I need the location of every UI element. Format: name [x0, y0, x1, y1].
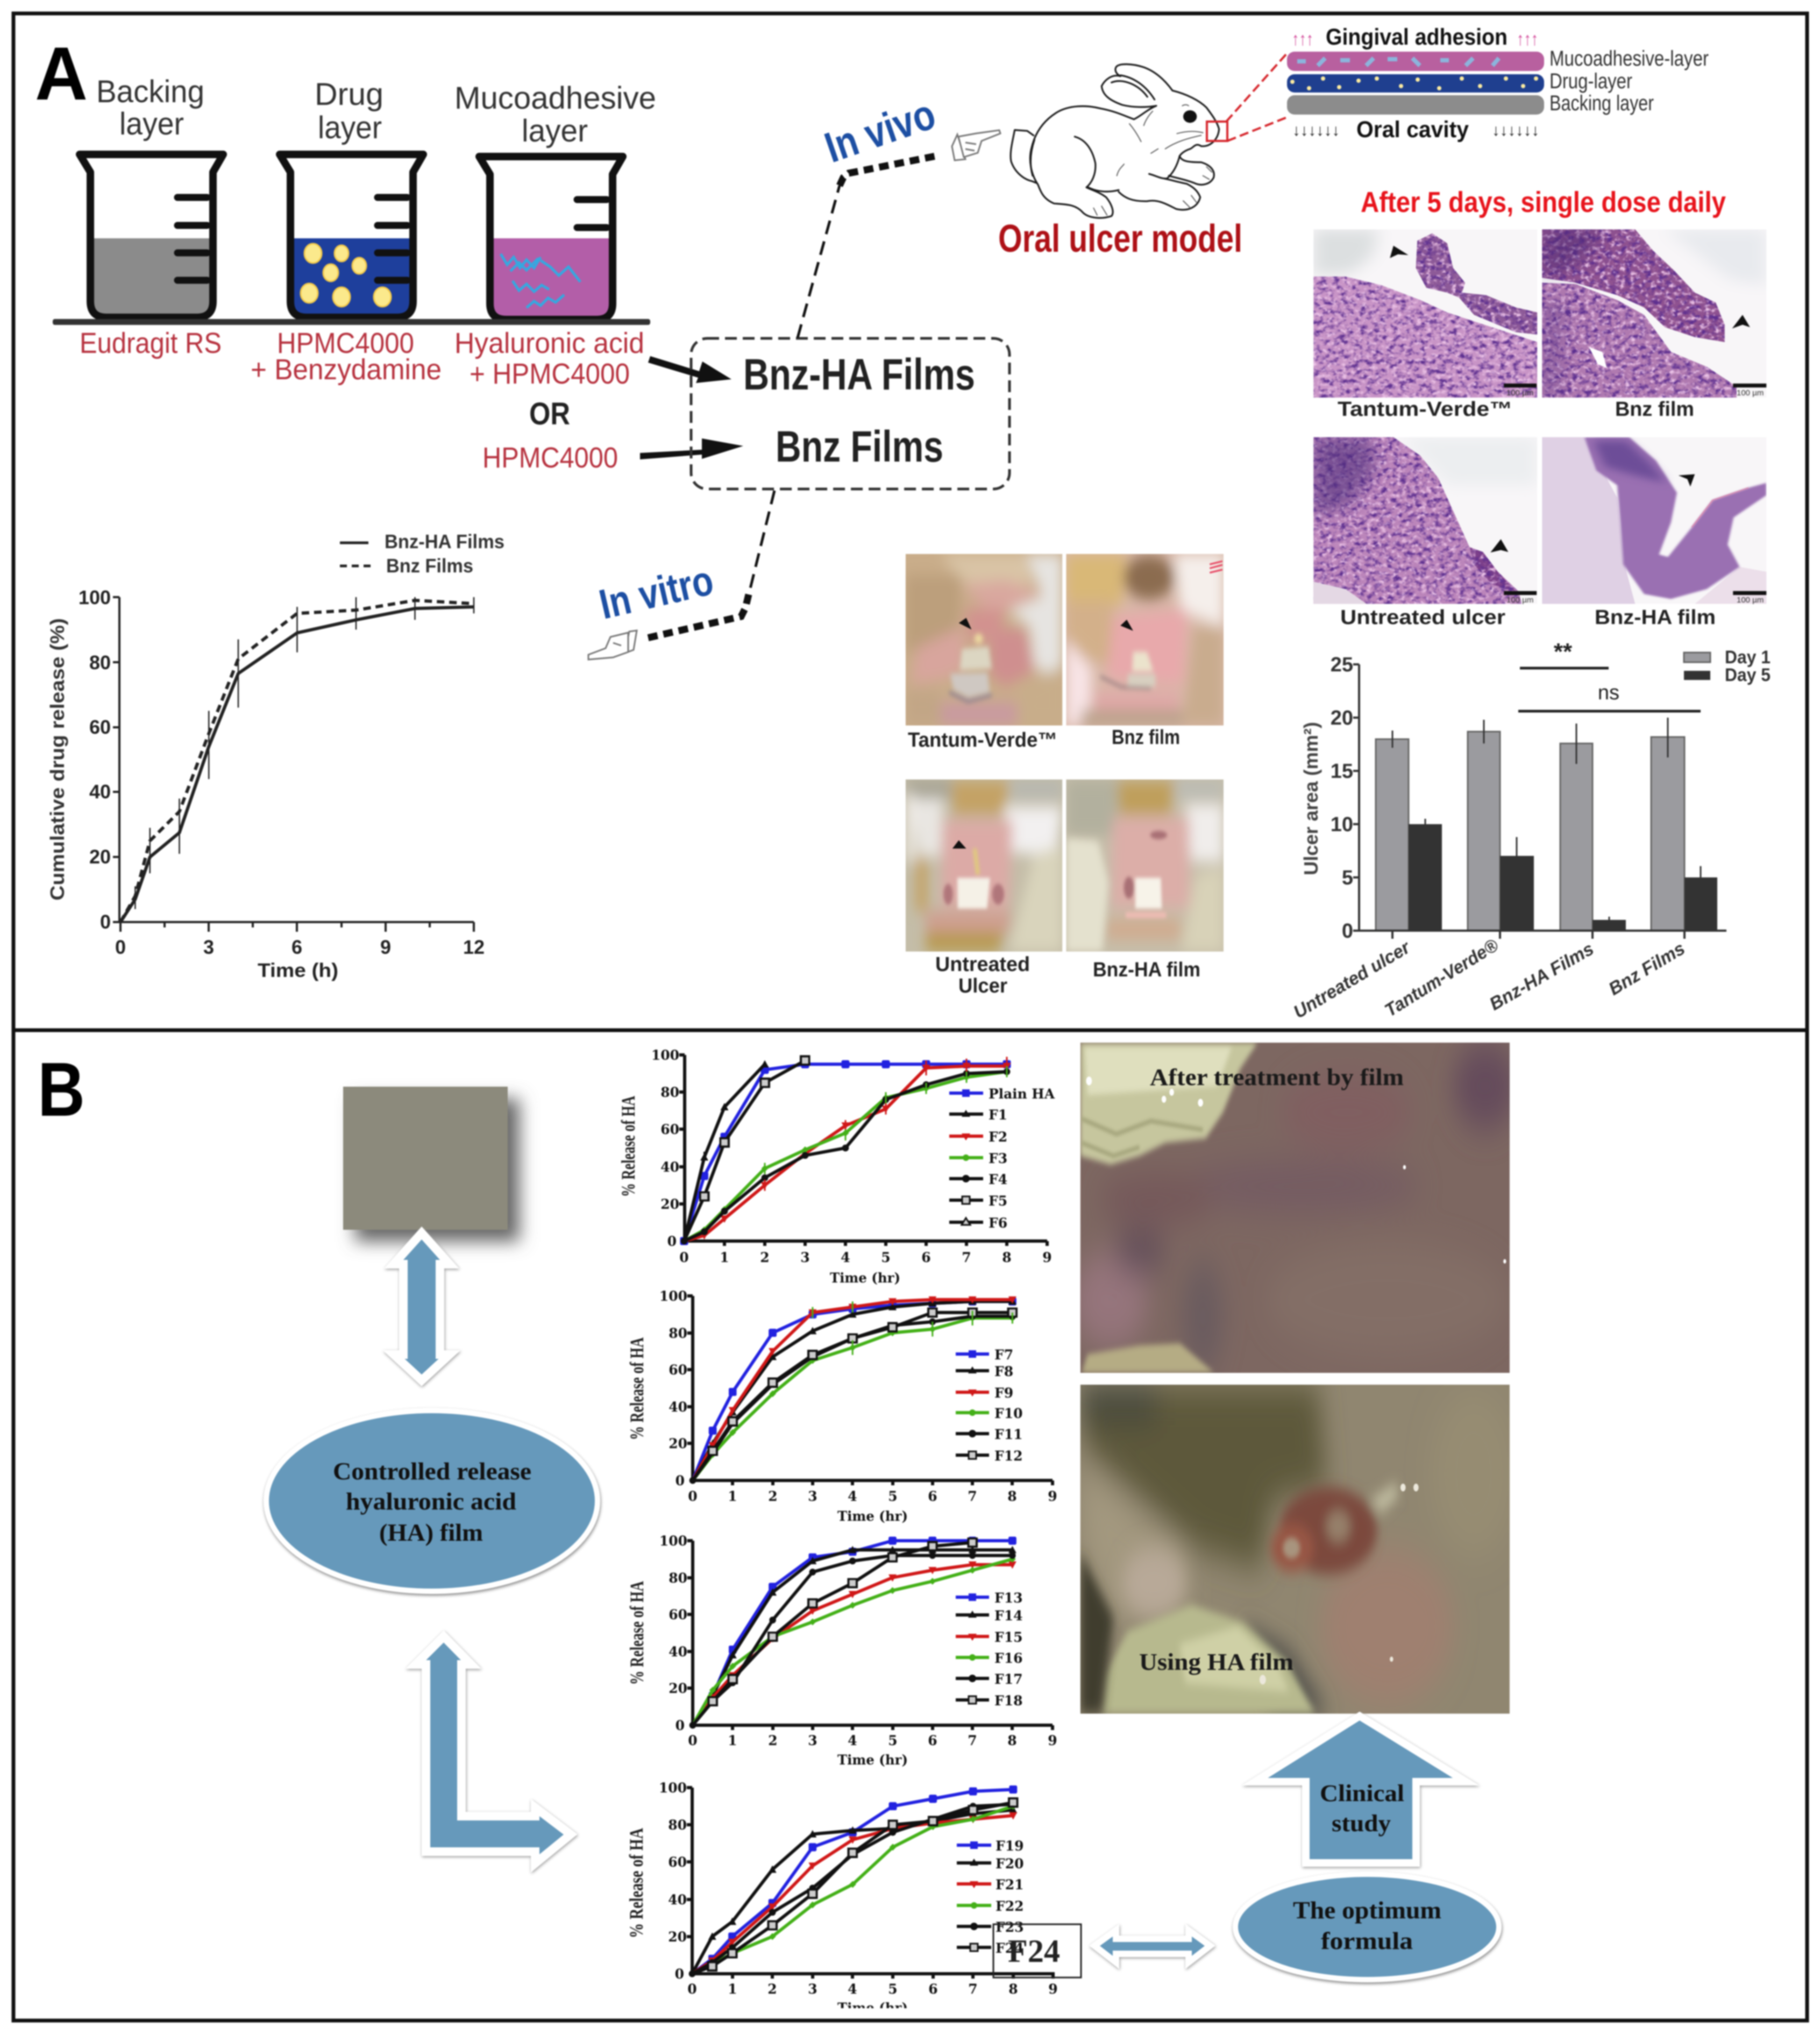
legend: F16	[994, 1650, 1023, 1666]
histology: Bnz-HA film	[1542, 437, 1766, 604]
x numbers: 8	[1008, 1981, 1018, 1997]
y numbers: 40	[668, 1892, 687, 1908]
double arrow F24 to optimum formula	[1094, 1930, 1210, 1962]
x numbers: 4	[848, 1981, 857, 1997]
x numbers: 7	[962, 1250, 971, 1265]
y numbers: 0	[676, 1718, 685, 1733]
y axis numbers: 0	[1342, 920, 1353, 942]
label: drug layer: layer	[318, 110, 382, 145]
y numbers: 40	[660, 1159, 679, 1175]
axis titles	[625, 1828, 908, 2016]
legend	[956, 1590, 1023, 1709]
photo: Bnz-HA film	[1066, 779, 1224, 952]
legend: F11	[994, 1427, 1023, 1442]
x numbers: 2	[768, 1489, 778, 1504]
x numbers: 0	[687, 1981, 697, 1997]
release chart 4: F19-F24	[625, 1780, 1058, 2018]
y axis numbers	[79, 586, 111, 933]
data series	[684, 1057, 1007, 1241]
legend: F23	[996, 1919, 1024, 1935]
legend: F24	[996, 1940, 1024, 1956]
legend: F3	[989, 1151, 1007, 1166]
ellipse: controlled release HA film	[266, 1411, 598, 1591]
y numbers	[659, 1533, 687, 1733]
x numbers: 9	[1048, 1489, 1057, 1504]
y axis numbers: 20	[1331, 707, 1353, 729]
film names: Bnz-HA Films	[743, 350, 975, 399]
series Bnz-HA Films	[120, 607, 474, 922]
ellipse: controlled release HA film: (HA) film	[379, 1519, 483, 1546]
icon: pointing hand in vitro	[588, 630, 637, 660]
red inset box on mouth	[1207, 122, 1227, 141]
rabbit eye	[1183, 110, 1197, 123]
y axis numbers: 5	[1342, 867, 1353, 889]
beaker: backing layer	[80, 154, 223, 317]
axis titles	[617, 1096, 900, 1286]
axis titles: % Release of HA	[626, 1337, 648, 1440]
axis titles: Time (hr)	[837, 1752, 908, 1768]
bar chart: ulcer area	[1290, 639, 1771, 1023]
y numbers: 100	[659, 1288, 687, 1304]
legend: Day 5	[1725, 665, 1771, 685]
label: backing layer: Backing	[96, 74, 204, 109]
y numbers: 60	[669, 1362, 687, 1378]
x axis labels: Untreated ulcer	[1290, 937, 1414, 1023]
label: backing layer	[96, 74, 204, 141]
legend: F13	[994, 1590, 1023, 1606]
x numbers: 5	[881, 1250, 891, 1265]
legend: F22	[996, 1898, 1024, 1914]
legend: F20	[996, 1856, 1024, 1872]
histology: Untreated ulcer	[1313, 437, 1537, 604]
legend: F1	[989, 1107, 1007, 1123]
photo captions: Untreated	[935, 953, 1030, 976]
significance markers	[1518, 639, 1701, 711]
x numbers: 4	[848, 1489, 857, 1504]
photo captions	[908, 726, 1200, 997]
y numbers: 20	[669, 1436, 687, 1451]
x numbers: 8	[1007, 1733, 1017, 1748]
x numbers: 2	[767, 1981, 777, 1997]
backing layer	[1287, 95, 1544, 115]
y numbers: 80	[669, 1570, 687, 1586]
release chart 2: F7-F12	[626, 1288, 1057, 1524]
caption: after treatment: After treatment by film	[1150, 1064, 1404, 1090]
bench line	[53, 319, 650, 325]
scale bar values	[1506, 388, 1764, 605]
chart legend	[340, 530, 504, 577]
pink up arrows: ↑↑↑	[1517, 29, 1538, 49]
x axis title: Time (h)	[258, 959, 338, 981]
legend: F14	[994, 1608, 1023, 1624]
histology: Tantum-Verde	[1313, 229, 1537, 398]
trilayer film diagram	[1287, 24, 1709, 143]
legend: Day 1	[1725, 647, 1771, 668]
panel B: controlled release hyaluronic acid film	[38, 1043, 1517, 2018]
photo: Bnz film	[1066, 554, 1224, 726]
y numbers: 100	[659, 1533, 687, 1549]
photo: after treatment	[1073, 1043, 1517, 1374]
film photograph	[343, 1087, 508, 1230]
x numbers: 1	[720, 1250, 729, 1265]
axis titles: % Release of HA	[626, 1581, 648, 1685]
x numbers: 9	[1048, 1981, 1058, 1997]
photo: using HA film	[1080, 1385, 1517, 1714]
histology captions: Bnz-HA film	[1595, 606, 1716, 629]
axis titles: % Release of HA	[617, 1096, 639, 1197]
photo captions: Bnz film	[1112, 726, 1180, 749]
ingredient labels: HPMC4000	[482, 442, 618, 474]
chart legend: Bnz-HA Films	[385, 530, 504, 552]
y numbers: 80	[668, 1817, 687, 1833]
legend: F7	[994, 1347, 1013, 1363]
rabbit tail	[1011, 130, 1036, 183]
x numbers: 1	[728, 1733, 737, 1748]
chart legend: Bnz Films	[386, 555, 473, 577]
x numbers: 3	[808, 1733, 817, 1748]
panel letter A: A	[35, 31, 88, 116]
photo: Tantum-Verde	[906, 554, 1062, 726]
x numbers	[688, 1733, 1057, 1748]
label: drug layer: Drug	[315, 77, 383, 112]
legend	[949, 1086, 1055, 1231]
legend: F12	[994, 1448, 1023, 1464]
x numbers: 0	[679, 1250, 689, 1265]
in vitro path	[647, 491, 774, 638]
y numbers: 60	[668, 1854, 687, 1870]
axes	[1353, 664, 1726, 939]
histology captions	[1338, 398, 1716, 629]
label: mucoadhesive layer: Mucoadhesive	[454, 81, 656, 116]
y axis numbers: 0	[100, 911, 111, 933]
x numbers	[679, 1250, 1052, 1265]
ingredient labels: Hyaluronic acid	[454, 327, 644, 359]
clinical study arrow: study	[1332, 1810, 1391, 1837]
legend: F21	[996, 1877, 1024, 1893]
x axis numbers: 0	[115, 936, 126, 958]
y numbers: 0	[675, 1966, 684, 1982]
double arrow film to ellipse	[394, 1233, 450, 1380]
x numbers: 6	[928, 1733, 937, 1748]
crop mask at chart bottom	[807, 2008, 936, 2018]
y axis numbers: 20	[89, 846, 111, 868]
histology captions: Tantum-Verde™	[1338, 398, 1512, 421]
x numbers: 5	[888, 1733, 898, 1748]
dashed film box	[691, 338, 1009, 489]
data series	[692, 1789, 1013, 1974]
y axis numbers: 100	[79, 586, 111, 608]
scale bar values: 100 µm	[1506, 388, 1533, 398]
x numbers: 0	[688, 1733, 698, 1748]
x numbers	[687, 1981, 1058, 1997]
y numbers: 0	[667, 1234, 677, 1249]
arrow to Bnz-HA Films	[648, 356, 731, 383]
x numbers: 6	[928, 1981, 938, 1997]
axis titles: Time (hr)	[830, 1270, 900, 1286]
legend: F10	[994, 1406, 1023, 1421]
series Bnz Films	[120, 600, 474, 922]
panel A: film preparation and evaluation	[35, 24, 1771, 1023]
data series	[693, 1541, 1012, 1725]
legend: F9	[994, 1385, 1013, 1401]
y axis numbers: 10	[1331, 813, 1353, 836]
x axis labels	[1290, 934, 1689, 1023]
x numbers: 1	[728, 1489, 737, 1504]
x axis numbers: 3	[203, 936, 214, 958]
legend: F15	[994, 1629, 1023, 1645]
axis titles: Time (hr)	[837, 1508, 908, 1524]
axis titles	[626, 1581, 908, 1768]
label: backing layer: layer	[119, 107, 184, 141]
y axis numbers: 80	[89, 651, 111, 674]
x numbers: 1	[728, 1981, 737, 1997]
rabbit details	[1093, 105, 1212, 215]
L-shaped arrow to charts	[416, 1636, 571, 1863]
significance markers: **	[1554, 639, 1573, 665]
release chart 1: Plain HA, F1-F6	[617, 1047, 1055, 1286]
drug layer	[1287, 74, 1544, 93]
photo captions: Tantum-Verde™	[908, 729, 1057, 752]
photo captions: Bnz-HA film	[1093, 959, 1200, 981]
x numbers: 3	[808, 1489, 817, 1504]
y numbers: 60	[660, 1122, 679, 1137]
in vivo path	[798, 156, 936, 338]
x numbers: 5	[888, 1981, 898, 1997]
histology heading: After 5 days, single dose daily	[1361, 186, 1726, 218]
x axis numbers	[115, 936, 485, 958]
chart axes	[687, 1541, 1053, 1730]
pink up arrows	[1292, 29, 1538, 49]
label: drug layer	[315, 77, 383, 145]
chart axes	[687, 1296, 1053, 1485]
x numbers: 7	[968, 1489, 977, 1504]
line chart: cumulative drug release	[46, 530, 504, 981]
OR: OR	[529, 396, 570, 431]
panel letter B: B	[38, 1047, 85, 1132]
legend: F2	[989, 1129, 1007, 1145]
in vivo label: In vivo	[819, 90, 941, 172]
axis titles: Time (hr)	[837, 2000, 908, 2016]
legend: F6	[989, 1215, 1007, 1231]
y numbers: 80	[669, 1326, 687, 1341]
x axis labels: Bnz-HA Films	[1486, 939, 1597, 1015]
chart axes	[113, 597, 474, 932]
y axis title: Ulcer area (mm²)	[1300, 722, 1322, 875]
x numbers: 2	[760, 1250, 770, 1265]
histology panels	[1313, 229, 1766, 604]
ingredient labels: + HPMC4000	[470, 358, 630, 390]
axis titles: % Release of HA	[625, 1828, 647, 1938]
y numbers	[651, 1047, 679, 1249]
x numbers: 3	[800, 1250, 810, 1265]
legend	[1684, 647, 1771, 685]
down arrows: ↓↓↓↓↓↓	[1492, 122, 1539, 139]
x numbers: 4	[841, 1250, 850, 1265]
x numbers: 3	[808, 1981, 817, 1997]
chart axes	[687, 1788, 1055, 1979]
legend: F4	[989, 1172, 1007, 1187]
down arrows	[1292, 122, 1539, 139]
x numbers: 9	[1042, 1250, 1052, 1265]
significance markers: ns	[1598, 682, 1619, 704]
y axis numbers: 40	[89, 781, 111, 803]
y numbers: 0	[676, 1473, 685, 1489]
ellipse: controlled release HA film: Controlled release	[333, 1457, 531, 1485]
clinical photographs	[1073, 1043, 1517, 1714]
x axis labels: Bnz Films	[1605, 938, 1689, 1000]
legend: F18	[994, 1693, 1023, 1709]
arrow to Bnz Films	[640, 438, 743, 459]
x numbers: 0	[688, 1489, 698, 1504]
ellipse: optimum formula	[1235, 1874, 1499, 1980]
F24 callout box: F24	[1008, 1933, 1060, 1969]
rabbit body outline	[1030, 106, 1214, 218]
bars day 1	[1376, 732, 1684, 931]
x axis numbers: 6	[292, 936, 302, 958]
clinical study arrow	[1255, 1716, 1466, 1863]
error bars	[1392, 718, 1701, 920]
legend: F19	[996, 1838, 1024, 1854]
beaker: drug layer	[280, 154, 423, 317]
x numbers: 9	[1048, 1733, 1057, 1748]
ingredient labels: + Benzydamine	[251, 353, 442, 386]
data series	[120, 597, 474, 922]
beaker: mucoadhesive layer	[479, 157, 623, 320]
caption: using HA film: Using HA film	[1139, 1649, 1293, 1675]
rabbit mouth photos	[906, 554, 1224, 952]
x numbers: 4	[848, 1733, 857, 1748]
photo captions: Ulcer	[958, 975, 1007, 997]
in vitro label: In vitro	[595, 556, 717, 628]
film names	[743, 350, 975, 471]
layer names	[1549, 47, 1709, 115]
legend: Plain HA	[989, 1086, 1055, 1102]
histology: Bnz film	[1542, 229, 1766, 398]
scale bar values: 100 µm	[1506, 596, 1533, 605]
x numbers: 2	[768, 1733, 778, 1748]
layer names: Backing layer	[1549, 91, 1654, 115]
y numbers: 40	[669, 1399, 687, 1415]
ellipse: controlled release HA film: hyaluronic acid	[346, 1487, 516, 1515]
y numbers: 100	[659, 1780, 687, 1796]
x numbers: 8	[1007, 1489, 1017, 1504]
legend	[956, 1347, 1023, 1464]
zoom lines to layers	[1226, 53, 1290, 141]
ingredient labels: Eudragit RS	[80, 327, 222, 359]
rabbit head	[1172, 90, 1219, 156]
clinical study arrow: Clinical	[1320, 1780, 1404, 1806]
x numbers: 6	[928, 1489, 937, 1504]
photo: Untreated ulcer	[906, 779, 1062, 952]
x axis numbers: 9	[380, 936, 391, 958]
chart axes	[679, 1055, 1047, 1246]
label: mucoadhesive layer	[454, 81, 656, 148]
x numbers: 7	[968, 1733, 977, 1748]
y numbers: 100	[651, 1047, 679, 1063]
x axis labels: Tantum-Verde®	[1381, 934, 1502, 1021]
oral ulcer model label: Oral ulcer model	[998, 217, 1242, 260]
ellipse: optimum formula: The optimum	[1293, 1896, 1441, 1924]
legend: F17	[994, 1671, 1023, 1687]
legend: F5	[989, 1193, 1007, 1209]
y numbers: 20	[668, 1929, 687, 1945]
rabbit ears	[1101, 64, 1172, 119]
x numbers	[688, 1489, 1057, 1504]
y numbers: 60	[669, 1607, 687, 1622]
label: mucoadhesive layer: layer	[522, 114, 588, 148]
ingredient labels: HPMC4000	[277, 327, 414, 359]
x numbers: 7	[968, 1981, 978, 1997]
bars day 5	[1409, 824, 1717, 931]
ellipse: optimum formula: formula	[1321, 1927, 1413, 1954]
y axis numbers: 15	[1331, 760, 1353, 783]
y axis title: Cumulative drug release (%)	[46, 618, 68, 901]
histology captions: Untreated ulcer	[1340, 606, 1505, 629]
axis titles	[626, 1337, 908, 1524]
y numbers	[659, 1780, 687, 1982]
rabbit oral ulcer model	[1011, 64, 1219, 218]
release chart 3: F13-F18	[626, 1533, 1057, 1768]
histology captions: Bnz film	[1615, 398, 1694, 421]
icon: pointing hand in vivo	[952, 130, 1000, 160]
down arrows: ↓↓↓↓↓↓	[1292, 122, 1340, 139]
legend: F8	[994, 1364, 1013, 1379]
ingredient labels	[80, 327, 644, 474]
mucoadhesive layer	[1287, 52, 1544, 71]
y numbers: 80	[660, 1085, 679, 1100]
y numbers: 20	[669, 1681, 687, 1696]
y numbers: 20	[660, 1196, 679, 1212]
x numbers: 5	[888, 1489, 898, 1504]
gingival adhesion label: Gingival adhesion	[1326, 24, 1508, 50]
scale bar values: 100 µm	[1737, 596, 1764, 605]
layer names: Mucoadhesive-layer	[1549, 47, 1709, 70]
data series	[693, 1300, 1012, 1480]
F24 callout box	[993, 1924, 1081, 1978]
x numbers: 8	[1002, 1250, 1012, 1265]
y axis numbers	[1331, 654, 1353, 942]
legend	[957, 1838, 1024, 1956]
oral cavity label: Oral cavity	[1356, 117, 1469, 143]
x numbers: 6	[921, 1250, 931, 1265]
y numbers: 40	[669, 1644, 687, 1660]
scale bar values: 100 µm	[1737, 388, 1764, 398]
y axis numbers: 25	[1331, 654, 1353, 676]
x axis numbers: 12	[463, 936, 485, 958]
y axis numbers: 60	[89, 716, 111, 738]
y numbers	[659, 1288, 687, 1489]
pink up arrows: ↑↑↑	[1292, 29, 1313, 49]
film names: Bnz Films	[776, 422, 943, 471]
error bars	[135, 597, 474, 909]
layer names: Drug-layer	[1549, 69, 1632, 93]
